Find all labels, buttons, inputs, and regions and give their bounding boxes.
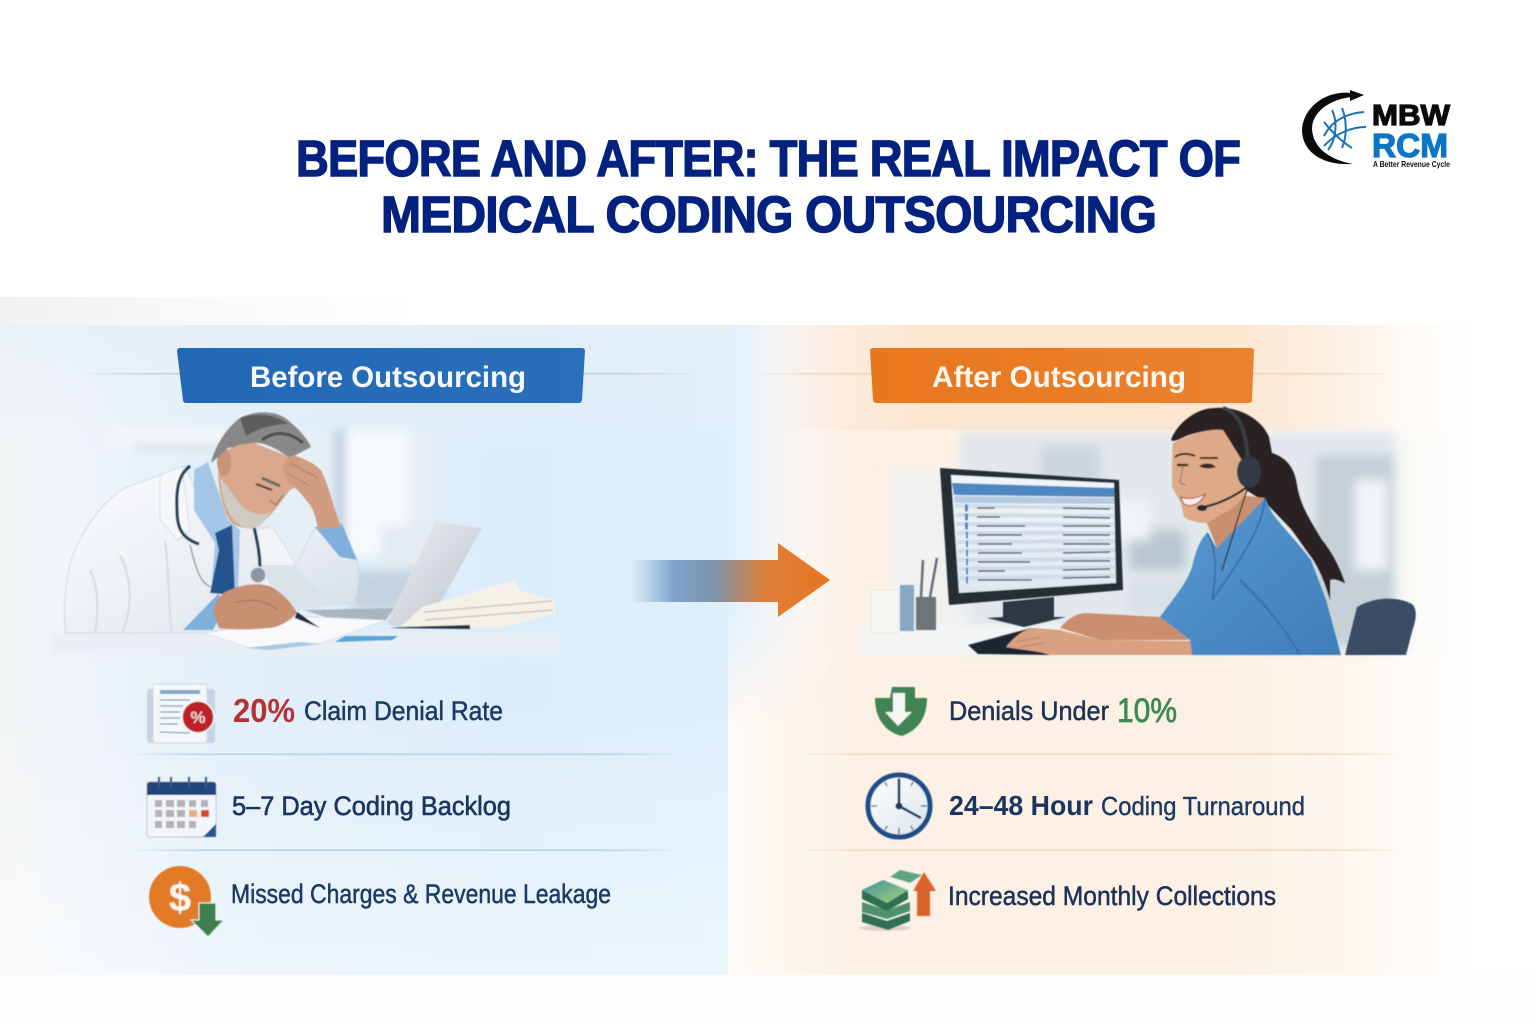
writing hand [213,584,297,630]
banner: before outsourcing [80,351,700,400]
banner: after outsourcing [750,351,1400,400]
blouse [1160,498,1341,655]
tie [210,525,235,595]
keyboard [304,608,394,620]
banner: before outsourcing: Before Outsourcing [250,361,526,394]
headset [1197,408,1261,570]
stethoscope [177,466,260,568]
office backdrop [105,428,440,610]
shirt [194,462,240,593]
stat: denials under 10%: Denials Under [949,696,1109,726]
stat: missed charges: Missed Charges & Revenue Leakage [231,879,611,909]
desk [860,625,1230,655]
stat: coding turnaround: Coding Turnaround [1101,791,1305,821]
logo: MBW RCM: RCM [1372,127,1448,164]
stat: monthly collections [859,870,1276,931]
stat: claim denial rate: 20% [233,692,295,729]
stat: monthly collections: Increased Monthly Collections [948,881,1276,911]
stat: claim denial rate: Claim Denial Rate [304,696,503,726]
neck and face [218,443,296,528]
stat: claim denial rate [147,684,503,743]
icon: green shield with down arrow [875,687,927,736]
laptop [386,522,482,627]
chair [1345,599,1416,655]
title: MEDICAL CODING OUTSOURCING [381,186,1156,243]
paper stack [401,580,556,628]
arrow: before to after [630,543,830,617]
papers on desk [204,617,386,648]
doctor coat [64,466,359,633]
icon: cash stack with up arrow [859,870,936,931]
lower cuff [183,593,222,630]
hand on forehead [283,456,341,529]
icon: falling dollar [149,866,224,937]
stat: denials under 10%: 10% [1117,692,1177,730]
logo swoosh and globe [1302,90,1366,164]
office backdrop [890,430,1445,655]
icon: denied claim document [147,684,215,743]
banner: after outsourcing: After Outsourcing [932,361,1186,394]
icon: denied claim document: % [190,708,206,727]
stat: coding turnaround: 24–48 Hour [949,790,1093,821]
illustration: stressed doctor at desk [50,412,560,655]
far arm [1060,613,1190,640]
desk [50,633,560,655]
panel: after background [728,325,1414,975]
icon: calendar [147,777,216,837]
panel: before background [0,325,728,975]
dividers [130,754,1405,851]
title [296,130,1240,243]
title: BEFORE AND AFTER: THE REAL IMPACT OF [296,130,1240,187]
stat: coding backlog [147,777,511,837]
desk organizer [871,590,898,633]
face [1172,430,1246,523]
stat: missed charges [149,866,611,937]
logo: MBW RCM [1302,90,1451,169]
stat: denials under 10% [875,687,1177,736]
raised forearm sleeve [315,524,357,560]
logo: MBW RCM: A Better Revenue Cycle [1373,159,1450,169]
screen [951,475,1116,593]
illustration: coder with headset at monitor [860,408,1445,655]
hair [211,412,311,463]
keyboard [968,628,1054,655]
near arm and hand [1006,628,1192,655]
logo: MBW RCM: MBW [1372,100,1451,132]
icon: clock [868,775,930,837]
stat: coding backlog: 5–7 Day Coding Backlog [232,791,511,821]
monitor stand [987,597,1066,627]
neck [1207,495,1265,548]
monitor [940,468,1123,605]
icon: falling dollar: $ [169,876,191,920]
hair [1171,408,1345,600]
spreadsheet rows [955,506,1116,580]
stat: coding turnaround [868,775,1305,837]
